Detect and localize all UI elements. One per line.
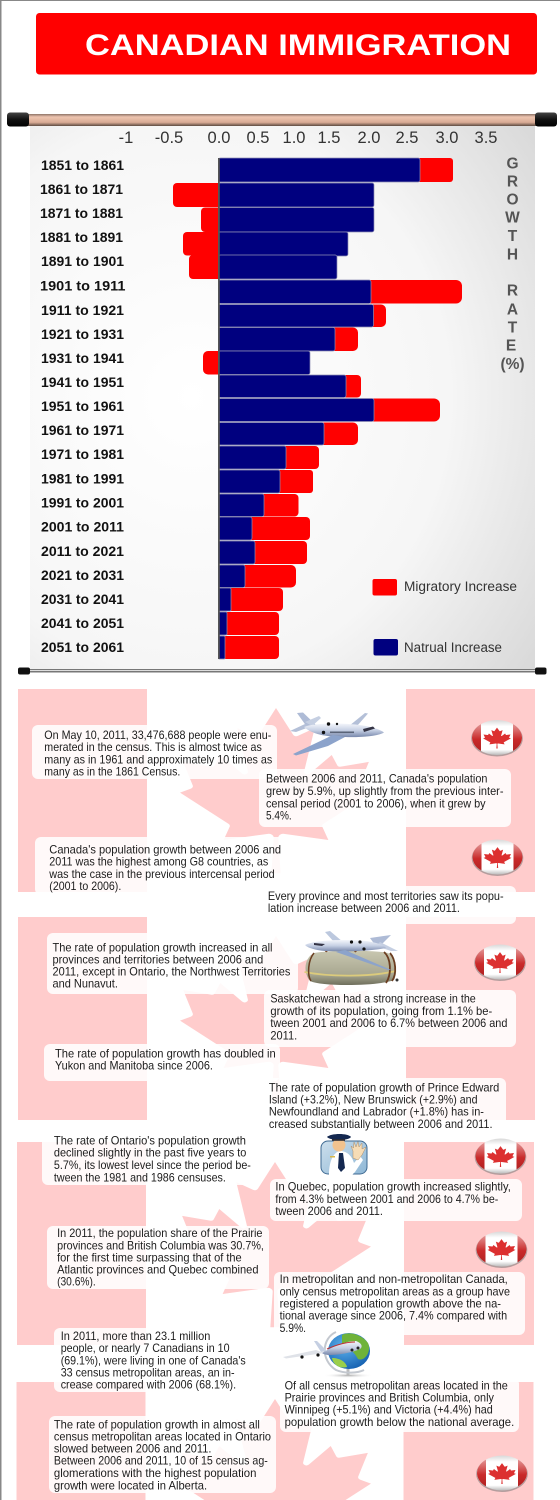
text block: Ontario metropolitan areas — [49, 1416, 276, 1493]
period labels: 1931 to 1941 — [41, 351, 125, 366]
vertical axis title: growth rate (%): A — [507, 302, 518, 318]
text block: metropolitan Canada: 5.9%. — [280, 1321, 306, 1335]
text block: Yukon and Manitoba: Yukon and Manitoba since 2006. — [55, 1059, 213, 1073]
background: flag section 1 — [18, 689, 535, 892]
text block: census count: On May 10, 2011, 33,476,688 people were enu- — [44, 728, 271, 742]
vertical axis title: growth rate (%): R — [507, 282, 518, 300]
text block: rate increased: The rate of population growth increased in all — [52, 940, 272, 954]
background: flag section 4 — [16, 1382, 534, 1500]
text block: Atlantic provinces: Newfoundland and Labrador (+1.8%) has in- — [269, 1105, 484, 1119]
period labels: 1851 to 1861 — [41, 158, 125, 173]
period labels — [40, 158, 126, 655]
text block: Ontario growth: tween the 1981 and 1986 censuses. — [54, 1170, 226, 1184]
text block: Quebec: tween 2006 and 2011. — [275, 1204, 383, 1218]
text block: census count: merated in the census. This is almost twice as — [44, 740, 262, 754]
text block: Winnipeg and Victoria: Winnipeg (+5.1%) and Victoria (+4.4%) had — [285, 1403, 493, 1417]
text block: growth 5.9% — [259, 769, 511, 827]
text block: Ontario metropolitan areas: growth were located in Alberta. — [54, 1478, 207, 1492]
text block: Yukon and Manitoba — [44, 1044, 280, 1081]
x axis labels: -0.5 — [155, 129, 183, 147]
background: flag section 3 — [17, 1142, 534, 1345]
period labels: 1991 to 2001 — [41, 496, 125, 510]
title banner: CANADIAN IMMIGRATION — [85, 29, 511, 62]
text block: Atlantic provinces: creased substantially between 2006 and 2011. — [269, 1117, 492, 1131]
text block: growth 5.9%: grew by 5.9%, up slightly from the previous inter- — [266, 784, 504, 798]
text block: census count: many as in the 1861 Census. — [44, 764, 180, 778]
period labels: 2041 to 2051 — [41, 616, 125, 631]
x axis labels: 3.0 — [436, 129, 458, 147]
text block: Quebec — [270, 1179, 522, 1227]
top scroll rod — [7, 112, 557, 126]
text block: Atlantic provinces: Island (+3.2%), New Brunswick (+2.9%) and — [269, 1092, 478, 1106]
text block: Ontario growth: 5.7%, its lowest level since the period be- — [54, 1158, 251, 1172]
period labels: 1911 to 1921 — [41, 303, 124, 318]
text block: G8 countries: was the case in the previous intercensal period — [48, 867, 275, 881]
text block: Ontario growth: The rate of Ontario's population growth — [54, 1134, 246, 1148]
text block: every province: lation increase between 2006 and 2011. — [268, 901, 460, 915]
text block: Winnipeg and Victoria: population growth below the national average. — [285, 1415, 514, 1429]
text block: Ontario metropolitan areas: census metropolitan areas located in Ontario — [54, 1430, 271, 1444]
text block: Winnipeg and Victoria: Prairie provinces and British Columbia, only — [285, 1391, 494, 1405]
text block: Atlantic provinces — [264, 1078, 506, 1132]
x axis labels — [119, 129, 497, 147]
text block: Winnipeg and Victoria — [280, 1378, 519, 1432]
text block: growth 5.9%: censal period (2001 to 2006), when it grew by — [266, 796, 486, 810]
text block: Ontario metropolitan areas: The rate of population growth in almost all — [54, 1417, 260, 1431]
vertical axis title: growth rate (%): E — [506, 338, 516, 354]
x axis labels: -1 — [119, 129, 133, 147]
x axis labels: 1.5 — [318, 129, 340, 147]
icon: pilot waving — [321, 1134, 367, 1175]
legend: migratory increase: Migratory Increase — [404, 579, 517, 594]
x axis labels: 3.5 — [475, 129, 497, 147]
vertical axis title: growth rate (%) — [500, 156, 525, 373]
text block: metropolitan Canada: tional average since 2006, 7.4% compared with — [280, 1309, 507, 1323]
text block: Quebec: In Quebec, population growth increased slightly, — [275, 1180, 511, 1194]
period labels: 1901 to 1911 — [40, 278, 126, 294]
text block: Prairie provinces: In 2011, the population share of the Prairie — [57, 1226, 263, 1240]
period labels: 2011 to 2021 — [41, 544, 124, 559]
text block: Saskatchewan: growth of its population, going from 1.1% be- — [270, 1004, 492, 1018]
text block: 23.1 million: crease compared with 2006 (68.1%). — [61, 1378, 236, 1392]
text block: every province: Every province and most territories saw its popu- — [268, 889, 504, 903]
vertical axis title: growth rate (%): G — [506, 156, 519, 172]
text block: Prairie provinces: Atlantic provinces and Quebec combined — [57, 1263, 258, 1277]
panel: growth chart scroll — [7, 112, 557, 674]
text block: Prairie provinces: for the first time surpassing that of the — [57, 1250, 242, 1264]
period labels: 1941 to 1951 — [41, 375, 125, 390]
x axis labels: 0.5 — [247, 129, 269, 147]
text block: G8 countries: (2001 to 2006). — [49, 879, 121, 893]
text block: 23.1 million: In 2011, more than 23.1 million — [61, 1329, 210, 1343]
text block: Ontario metropolitan areas: Between 2006 and 2011, 10 of 15 census ag- — [54, 1454, 268, 1468]
period labels: 2021 to 2031 — [41, 568, 125, 583]
title banner — [36, 13, 537, 74]
period labels: 1881 to 1891 — [40, 230, 124, 245]
text block: Saskatchewan: Saskatchewan had a strong increase in the — [270, 992, 476, 1006]
period labels: 2031 to 2041 — [41, 592, 125, 607]
vertical axis title: growth rate (%): O — [506, 192, 519, 208]
text block: Ontario metropolitan areas: glomerations with the highest population — [54, 1466, 256, 1480]
period labels: 2051 to 2061 — [41, 640, 125, 655]
text block: metropolitan Canada: In metropolitan and non-metropolitan Canada, — [280, 1272, 508, 1286]
text block: 23.1 million — [54, 1328, 250, 1392]
x axis labels: 2.0 — [358, 129, 380, 147]
legend: natural increase — [374, 639, 502, 656]
period labels: 1861 to 1871 — [40, 182, 124, 197]
text block: Winnipeg and Victoria: Of all census metropolitan areas located in the — [285, 1378, 508, 1392]
icon: airplane over travel bag — [303, 931, 398, 985]
period labels: 1961 to 1971 — [41, 423, 125, 438]
vertical axis title: growth rate (%): H — [507, 246, 518, 264]
text block: census count — [32, 725, 277, 779]
period labels: 1891 to 1901 — [41, 254, 125, 269]
text block: G8 countries — [35, 837, 286, 895]
text block: census count: many as in 1961 and approximately 10 times as — [44, 752, 272, 766]
period labels: 2001 to 2011 — [41, 520, 124, 534]
period labels: 1871 to 1881 — [40, 206, 124, 221]
text block: Prairie provinces: (30.6%). — [57, 1275, 96, 1289]
text block: metropolitan Canada: registered a population growth above the na- — [280, 1297, 501, 1311]
text block: Saskatchewan: 2011. — [270, 1028, 297, 1042]
text block: 23.1 million: people, or nearly 7 Canadians in 10 — [61, 1341, 230, 1355]
period labels: 1921 to 1931 — [41, 327, 125, 342]
natural increase bars — [218, 158, 420, 659]
text block: rate increased: and Nunavut. — [52, 977, 118, 991]
icon: airplane and globe — [283, 1332, 373, 1378]
text block: rate increased: 2011, except in Ontario, the Northwest Territories — [52, 965, 290, 979]
text block: Ontario growth — [42, 1130, 255, 1185]
period labels: 1981 to 1991 — [41, 472, 125, 486]
text block: Yukon and Manitoba: The rate of population growth has doubled in — [55, 1047, 276, 1061]
vertical axis title: growth rate (%): T — [508, 320, 518, 336]
period labels: 1971 to 1981 — [41, 447, 125, 462]
text block: Ontario growth: declined slightly in the past five years to — [54, 1146, 247, 1160]
x axis labels: 2.5 — [396, 129, 418, 147]
text block: metropolitan Canada: only census metropolitan areas as a group have — [280, 1284, 510, 1298]
legend: natural increase: Natrual Increase — [404, 640, 502, 655]
text block: Ontario metropolitan areas: slowed between 2006 and 2011. — [54, 1442, 211, 1456]
text block: Saskatchewan — [264, 990, 516, 1047]
vertical axis title: growth rate (%): (%) — [500, 356, 525, 373]
text block: growth 5.9%: Between 2006 and 2011, Canada's population — [266, 772, 487, 786]
text block: rate increased: provinces and territories between 2006 and — [52, 952, 263, 966]
vertical axis title: growth rate (%): W — [505, 210, 520, 226]
text block: Prairie provinces — [47, 1226, 269, 1289]
icon: airplane — [290, 712, 384, 756]
text block: rate increased — [47, 933, 298, 994]
background: flag section 2 — [18, 917, 535, 1120]
text block: G8 countries: 2011 was the highest among G8 countries, as — [49, 855, 268, 869]
x axis labels: 0.0 — [208, 129, 230, 147]
vertical axis title: growth rate (%): R — [507, 174, 518, 190]
text block: every province — [262, 886, 516, 924]
vertical axis title: growth rate (%): T — [508, 228, 518, 245]
migratory increase bars — [173, 158, 462, 659]
text block: Quebec: from 4.3% between 2001 and 2006 to 4.7% be- — [275, 1192, 498, 1206]
text block: G8 countries: Canada's population growth between 2006 and — [49, 842, 281, 856]
flag icons — [471, 720, 528, 1492]
chart background — [30, 125, 535, 669]
bottom scroll rod — [18, 668, 546, 674]
text block: metropolitan Canada — [274, 1272, 525, 1335]
period labels: 1951 to 1961 — [41, 399, 125, 414]
text block: 23.1 million: 33 census metropolitan areas, an in- — [61, 1365, 235, 1379]
text block: 23.1 million: (69.1%), were living in one of Canada's — [61, 1353, 246, 1367]
text block: Prairie provinces: provinces and British Columbia was 30.7%, — [57, 1238, 264, 1252]
x axis labels: 1.0 — [283, 129, 305, 147]
zero axis line — [218, 158, 220, 659]
text block: Saskatchewan: tween 2001 and 2006 to 6.7% between 2006 and — [270, 1016, 507, 1030]
text block: Atlantic provinces: The rate of population growth of Prince Edward — [269, 1080, 499, 1094]
text block: growth 5.9%: 5.4%. — [266, 808, 292, 822]
